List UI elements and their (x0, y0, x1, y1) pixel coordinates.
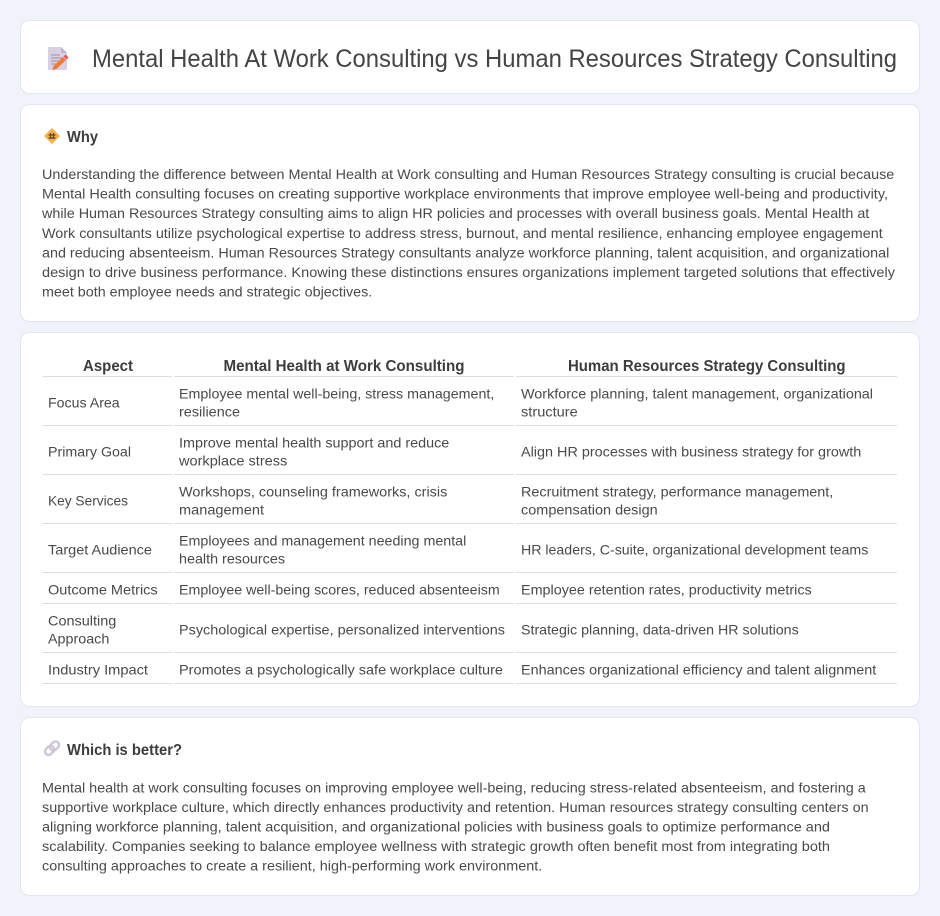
row: key services: compensation design (521, 501, 658, 517)
row: key services: Recruitment strategy, performance management, (521, 483, 833, 499)
row: industry impact (43, 661, 897, 684)
text block: verdict: Mental health at work consulting focuses on improving employee well-being, reducing stress-related absenteeism, and fostering a (42, 779, 866, 795)
row: consulting approach: Psychological expertise, personalized interventions (179, 621, 505, 637)
panel: comparison table (20, 332, 920, 706)
title: Mental Health At Work Consulting vs Human Resources Strategy Consulting (92, 45, 897, 73)
text block: verdict: consulting approaches to create a resilient, high-performing work environment. (42, 858, 542, 874)
text block: why explanation: while Human Resources Strategy consulting aims to align HR policies and processes with overall business goals. Mental Health at (41, 205, 869, 221)
row: key services: Workshops, counseling frameworks, crisis (179, 483, 447, 499)
row: focus area: Workforce planning, talent management, organizational (521, 385, 873, 401)
heading: which is better: Which is better? (67, 742, 182, 759)
icon: warning diamond (44, 128, 60, 144)
row: focus area: Focus Area (48, 394, 120, 410)
row: industry impact: Industry Impact (48, 661, 148, 677)
table header row (43, 358, 897, 377)
row: target audience: HR leaders, C-suite, organizational development teams (521, 541, 868, 557)
row: consulting approach: Strategic planning, data-driven HR solutions (521, 621, 799, 637)
panel: title header (20, 20, 920, 94)
row: target audience: health resources (179, 550, 285, 566)
row: consulting approach: Consulting (48, 612, 116, 628)
text block: verdict: aligning workforce planning, talent acquisition, and organizational policies with business goals to optimize performance and (42, 818, 830, 834)
panel: which is better (20, 718, 920, 896)
text block: why explanation (41, 166, 895, 300)
row: industry impact: Promotes a psychologically safe workplace culture (179, 661, 503, 677)
table header row: Human Resources Strategy Consulting (568, 358, 846, 375)
row: industry impact: Enhances organizational efficiency and talent alignment (521, 661, 876, 677)
row: focus area: structure (521, 403, 578, 419)
row: consulting approach: Approach (48, 630, 109, 646)
row: focus area: resilience (179, 403, 240, 419)
row: key services: Key Services (48, 492, 128, 508)
row: outcome metrics: Employee retention rates, productivity metrics (521, 581, 812, 597)
icon: chain link (43, 740, 61, 757)
row: outcome metrics: Outcome Metrics (48, 581, 158, 597)
row: target audience: Target Audience (48, 541, 152, 557)
row: primary goal: Improve mental health support and reduce (179, 434, 450, 450)
text block: why explanation: Work consultants utilize psychological expertise to address stress, burnout, and mental resilience, enhancing employee engagement (42, 225, 883, 241)
text block: verdict: supportive workplace culture, which directly enhances productivity and retention. Human resources strategy consulting centers on (42, 799, 869, 815)
text block: verdict (42, 779, 869, 874)
icon: document with pencil (48, 47, 68, 70)
table header row: Aspect (83, 358, 134, 375)
row: focus area: Employee mental well-being, stress management, (179, 385, 494, 401)
row: outcome metrics (43, 581, 897, 604)
row: outcome metrics: Employee well-being scores, reduced absenteeism (179, 581, 500, 597)
heading: why: Why (67, 129, 98, 146)
text block: why explanation: Mental Health consulting focuses on creating supportive workplace environments that improve employee well-being and productivity, (42, 186, 888, 202)
row: primary goal (43, 434, 897, 475)
row: key services: management (179, 501, 264, 517)
text block: why explanation: design to drive business performance. Knowing these distinctions ensures organizations implement targeted solutions that effectively (42, 264, 895, 280)
text block: verdict: scalability. Companies seeking to balance employee wellness with strategic growth often benefit most from integrating both (42, 838, 830, 854)
text block: why explanation: and reducing absenteeism. Human Resources Strategy consultants analyze workforce planning, talent acquisition, and organizational (42, 244, 889, 260)
text block: why explanation: meet both employee needs and strategic objectives. (42, 284, 372, 300)
row: focus area (43, 385, 897, 426)
row: consulting approach (43, 612, 897, 653)
row: primary goal: workplace stress (178, 452, 287, 468)
panel: why (20, 104, 920, 322)
row: target audience (43, 532, 897, 573)
row: target audience: Employees and management needing mental (179, 532, 466, 548)
row: key services (43, 483, 897, 524)
row: primary goal: Primary Goal (48, 443, 131, 459)
row: primary goal: Align HR processes with business strategy for growth (521, 443, 861, 459)
text block: why explanation: Understanding the difference between Mental Health at Work consulting and Human Resources Strategy consulting is crucial because (42, 166, 895, 182)
table header row: Mental Health at Work Consulting (224, 358, 464, 375)
